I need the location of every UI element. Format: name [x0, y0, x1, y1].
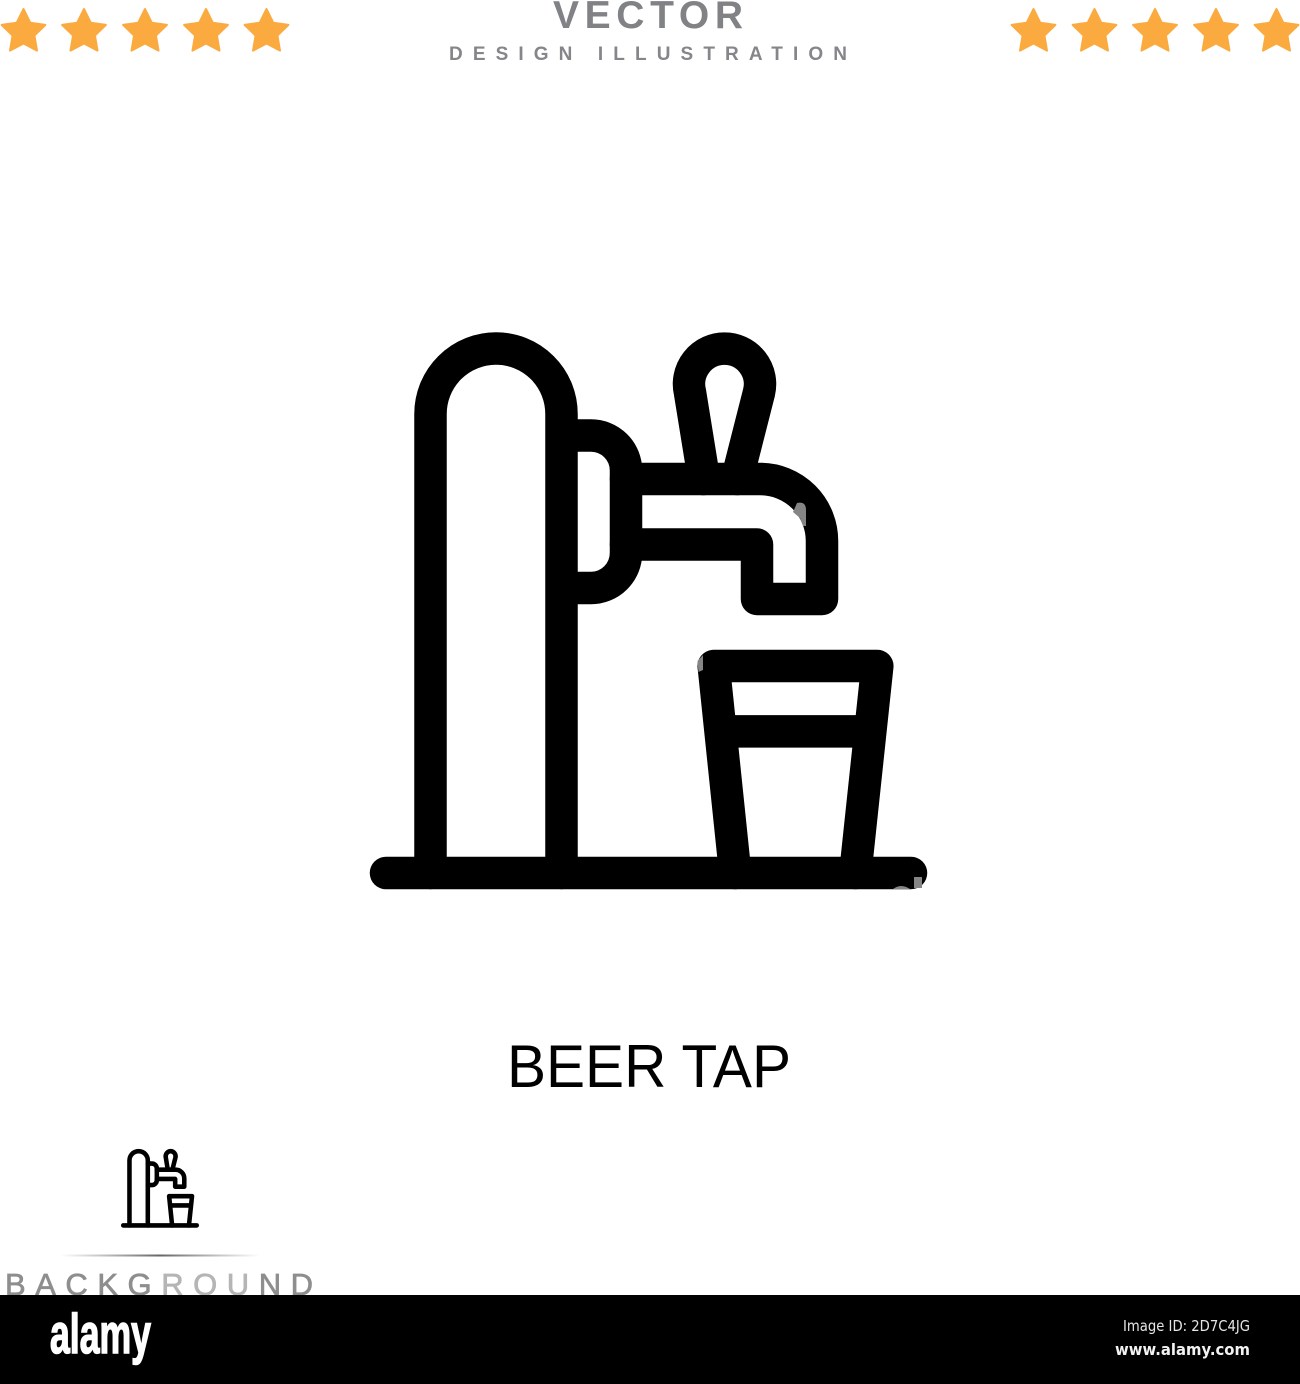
tap handle: [689, 349, 760, 479]
specks: watermark remnants on icon edges: [698, 503, 922, 889]
label: BACKGROUND: BACKG ROU ND: [5, 1267, 313, 1302]
footer bar: [0, 1295, 1300, 1384]
spout: [626, 479, 822, 599]
title: BEER TAP: BEER TAP: [507, 1033, 791, 1100]
base line: [386, 857, 911, 889]
right rating stars: [1012, 9, 1298, 51]
website: www.alamy.com: [1115, 1340, 1250, 1359]
glass fill line: [722, 715, 868, 748]
glass: [714, 666, 877, 873]
logo: alamy: alamy: [50, 1302, 151, 1365]
column bracket: [562, 436, 626, 588]
icon: beer tap: [386, 348, 911, 873]
icon: small beer tap: [123, 1151, 197, 1225]
column: [430, 348, 562, 873]
image id: Image ID: 2D7C4JG: [1123, 1317, 1250, 1335]
subheading: DESIGN ILLUSTRATION: DESIGN ILLUSTRATION: [449, 44, 847, 65]
left rating stars: [2, 9, 288, 51]
